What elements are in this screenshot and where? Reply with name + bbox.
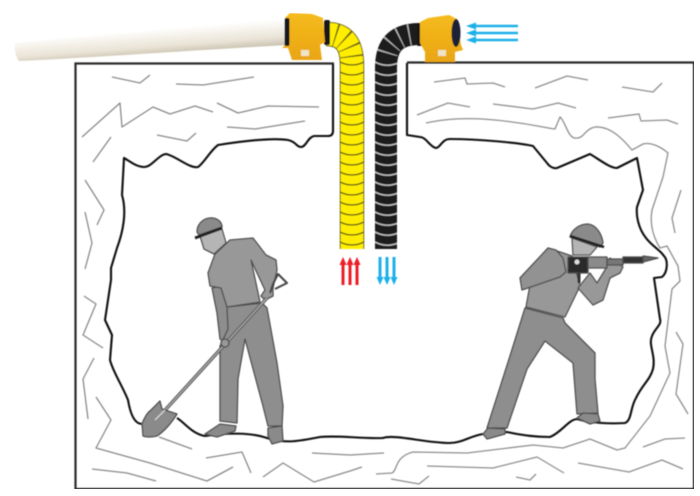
shirt and right arm [208,238,277,307]
jackhammer body [568,257,588,273]
worker with jackhammer [483,224,658,439]
trousers [487,308,598,428]
black flexible intake hose [375,34,420,249]
goggles strap [195,228,222,238]
face [572,238,597,255]
worker with shovel [142,218,287,444]
far arm [578,258,623,305]
blue intake air arrows [466,22,518,44]
hard hat [570,224,603,247]
shovel handle [157,298,267,419]
rock crack lines: left side [82,75,384,482]
white exhaust duct pipe [15,18,287,61]
jackhammer bit [643,256,658,262]
near arm [520,248,566,290]
rock crack lines: right side [376,76,688,484]
blue intake air arrows below hose [376,257,398,285]
neck and face [200,229,226,254]
jackhammer handle [578,273,580,283]
jackhammer cylinder [588,257,607,268]
yellow intake fan [417,15,463,62]
shovel grip [270,274,287,293]
hat brim [570,236,604,247]
shovel blade [142,401,177,437]
red exhaust air arrows [340,257,360,285]
hard hat [197,218,222,235]
hand on handle [221,339,229,347]
shoes [483,413,600,439]
shirt [526,248,580,317]
left arm [212,286,229,343]
trousers [220,303,283,426]
jackhammer barrel [607,259,623,265]
yellow flexible exhaust hose [326,34,364,249]
shoes [205,424,283,444]
yellow exhaust fan [282,13,330,60]
mine frame border [76,62,694,489]
cave tunnel outline [105,63,667,443]
